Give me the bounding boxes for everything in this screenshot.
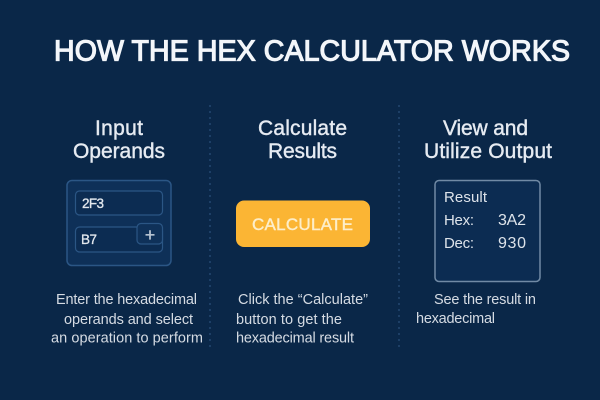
- description: input: operands and select: [64, 312, 193, 328]
- heading: view output: View and: [443, 117, 528, 140]
- result box: Result: [444, 189, 488, 206]
- panel: view output: [416, 117, 552, 327]
- description: calculate: [236, 292, 368, 346]
- panel: input operands: [51, 117, 203, 346]
- calculate button: CALCULATE: [252, 215, 353, 234]
- description: output: See the result in: [434, 292, 536, 308]
- result box: [435, 180, 540, 282]
- heading: view output: [424, 117, 552, 163]
- heading: calculate results: Results: [268, 140, 337, 163]
- description: calculate: button to get the: [236, 312, 342, 328]
- title: HOW THE HEX CALCULATOR WORKS: [54, 36, 570, 68]
- result box: 3A2: [498, 212, 526, 229]
- description: input: an operation to perform: [51, 330, 203, 346]
- result box: Dec:: [444, 235, 474, 252]
- input form icon: [67, 180, 171, 266]
- description: output: [416, 292, 536, 327]
- heading: input operands: [73, 117, 165, 163]
- heading: input operands: Operands: [73, 140, 165, 163]
- input form icon: B7: [81, 232, 97, 247]
- description: output: hexadecimal: [416, 311, 495, 327]
- description: calculate: hexadecimal result: [236, 330, 354, 346]
- description: input: Enter the hexadecimal: [56, 292, 197, 308]
- result box: Hex:: [444, 212, 474, 229]
- input form icon: 2F3: [82, 196, 104, 211]
- result box: 930: [498, 235, 526, 252]
- description: calculate: Click the “Calculate”: [238, 292, 368, 308]
- heading: view output: Utilize Output: [424, 140, 552, 163]
- heading: calculate results: [258, 117, 347, 163]
- heading: input operands: Input: [95, 117, 143, 140]
- calculate button: [236, 200, 370, 247]
- heading: calculate results: Calculate: [258, 117, 347, 140]
- description: input: [51, 292, 203, 346]
- input form icon: +: [145, 225, 155, 245]
- panel: calculate results: [236, 117, 370, 346]
